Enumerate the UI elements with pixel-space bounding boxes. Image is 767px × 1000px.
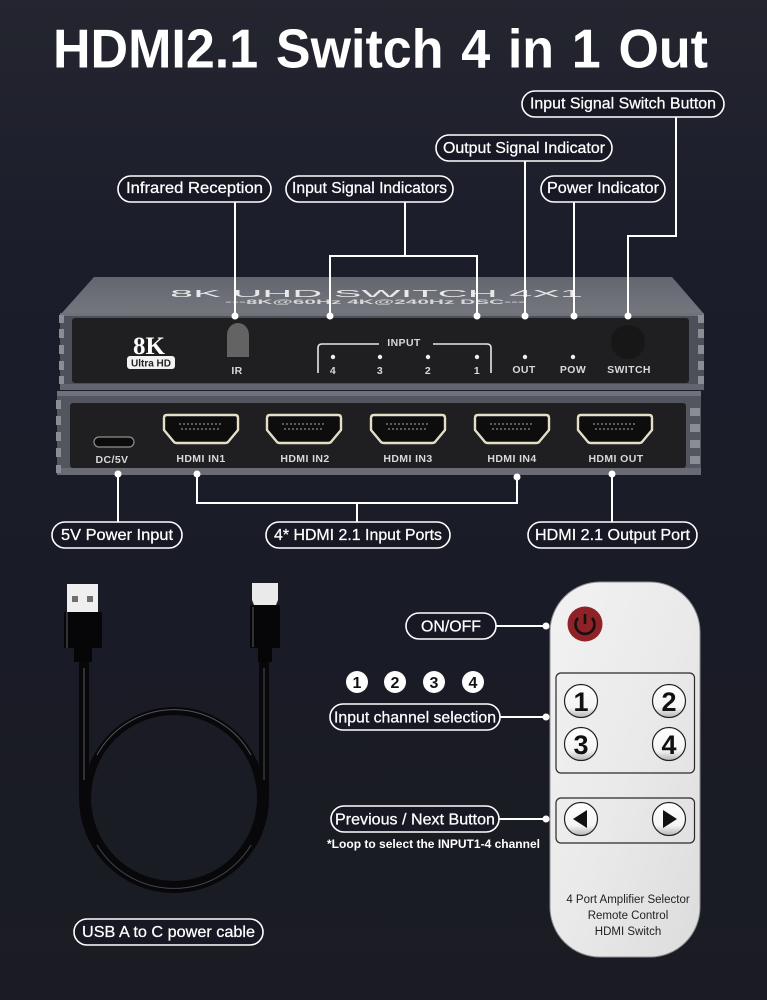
callout: HDMI output port: HDMI 2.1 Output Port [535,527,691,544]
indicator labels: OUT [512,364,536,376]
HDMI IN1 port [164,415,238,443]
callout: power indicator: Power Indicator [547,180,660,197]
badge: 8K Ultra HD: 8K [133,333,166,360]
callout: input channel selection: Input channel selection [334,710,496,726]
port labels [176,453,644,465]
indicator dots [331,355,575,359]
note: loop selection: *Loop to select the INPUT1-4 channel [327,837,540,851]
input bracket [318,344,491,373]
callout: USB cable: USB A to C power cable [82,924,255,941]
callout: HDMI input ports [266,522,450,548]
callout: HDMI input ports: 4* HDMI 2.1 Input Ports [274,527,442,544]
button 2: 2 [661,687,677,717]
channel number markers: 1 [353,675,362,692]
indicator labels: 3 [377,365,383,377]
callout: input signal indicators: Input Signal Indicators [292,180,447,197]
indicator labels: 4 [330,365,336,377]
HDMI IN4 port [475,415,549,443]
indicator labels [330,364,651,377]
remote caption [566,894,690,938]
indicator labels: 1 [474,365,480,377]
button 1 [564,684,598,718]
button 2 [652,684,686,718]
remote leader lines [496,622,550,822]
title: HDMI2.1 Switch 4 in 1 Out [53,18,708,80]
callout: on/off: ON/OFF [421,618,481,636]
remote control [550,582,700,957]
IR label: IR [231,365,243,377]
channel number markers: 2 [391,675,400,692]
device front body [60,313,704,390]
number button box [556,673,694,773]
leader lines: bottom callouts [114,470,616,522]
button 3 [564,728,598,760]
arrow button box [556,798,694,843]
port labels: HDMI IN4 [487,453,537,465]
callout: output signal indicator: Output Signal Indicator [443,140,606,157]
callout: input channel selection [330,704,500,730]
port labels: HDMI IN1 [176,453,226,465]
button 3: 3 [573,730,589,760]
callout: USB cable [74,919,263,945]
back black panel [70,403,686,468]
callout: HDMI output port [528,522,697,548]
front black panel [72,318,689,383]
leader lines: top callouts [232,117,676,320]
USB-A plug [64,584,102,662]
device top face [61,277,704,314]
callout: 5V power input [52,522,182,548]
side vents [59,315,704,384]
button 4 [652,728,686,760]
callout: on/off [406,613,496,639]
IR window [227,323,249,357]
previous button [564,802,598,836]
port labels: HDMI IN2 [280,453,330,465]
callout: infrared reception [118,176,271,202]
back body [57,391,701,475]
HDMI IN2 port [267,415,341,443]
channel number markers [346,671,484,693]
HDMI OUT port [578,415,652,443]
callout: input signal indicators [286,176,453,202]
switch device: front unit [59,277,704,390]
channel number markers: 4 [469,675,478,692]
button 4: 4 [661,730,677,760]
USB-C plug [250,583,280,662]
HDMI IN3 port [371,415,445,443]
callout: power indicator [541,176,665,202]
input label: INPUT [387,337,421,349]
next button [652,802,686,836]
power button [568,606,602,642]
remote caption: Remote Control [588,910,668,922]
callout: infrared reception: Infrared Reception [126,180,263,197]
callout: output signal indicator [436,135,612,161]
port labels: HDMI IN3 [383,453,433,465]
callout: previous / next button [331,806,499,832]
callout: 5V power input: 5V Power Input [61,527,174,544]
device spec text: ---8K@60Hz 4K@240Hz DSC--- [225,299,525,306]
USB-C port [94,437,134,447]
button 1: 1 [573,687,589,717]
badge: 8K Ultra HD [127,333,175,370]
remote caption: 4 Port Amplifier Selector [566,894,690,906]
indicator labels: POW [560,364,586,376]
switch button [611,325,645,359]
side vents [56,400,700,473]
indicator labels: SWITCH [607,364,651,376]
device model text: 8K UHD SWITCH 4X1 [170,289,585,300]
channel number markers: 3 [430,675,439,692]
switch device: back unit [56,391,701,475]
callout: input signal switch button [522,91,724,117]
cable loop [84,660,264,888]
badge: 8K Ultra HD: Ultra HD [131,358,171,370]
indicator labels: 2 [425,365,431,377]
callout: input signal switch button: Input Signal Switch Button [530,96,716,112]
callout: previous / next button: Previous / Next Button [335,812,495,828]
remote body [550,582,700,957]
remote caption: HDMI Switch [595,926,661,938]
USB A to C cable [64,583,280,888]
DC/5V label: DC/5V [96,454,128,466]
port labels: HDMI OUT [588,453,644,465]
